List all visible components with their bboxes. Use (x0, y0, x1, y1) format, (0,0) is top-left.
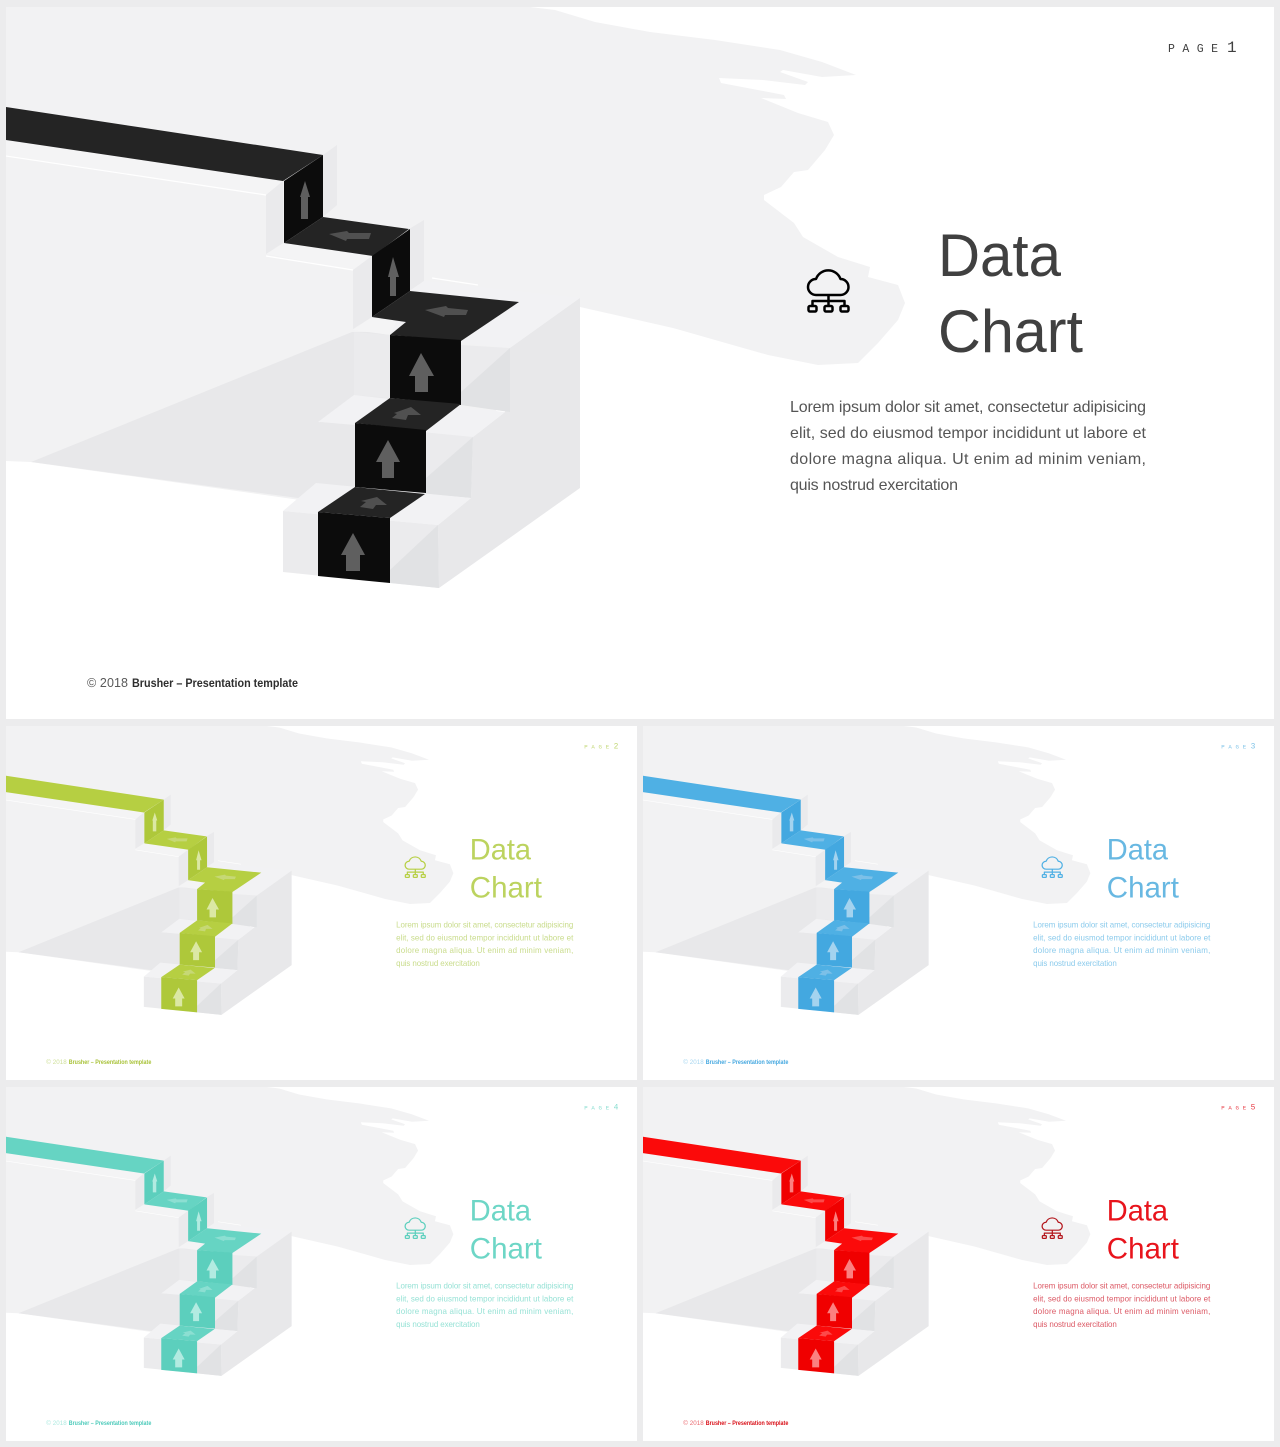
title (1107, 834, 1180, 905)
floor shadow (655, 1249, 849, 1337)
page number: 4 (614, 1103, 619, 1112)
body text: elit, sed do eiusmod tempor incididunt ut labore et (396, 933, 574, 942)
panel: slide 2 green (6, 726, 637, 1080)
brush stroke background (6, 726, 453, 971)
page number: 5 (1251, 1103, 1256, 1112)
page number: 2 (614, 742, 619, 751)
staircase (6, 107, 580, 588)
icon: cloud network (1042, 857, 1062, 877)
title: Data (1107, 1195, 1168, 1228)
body text: Lorem ipsum dolor sit amet, consectetur adipisicing (396, 920, 573, 929)
floor shadow (18, 1249, 212, 1337)
title (938, 222, 1083, 365)
carpet path with arrows (6, 107, 519, 583)
page number (1221, 1103, 1256, 1112)
footer: © 2018 (46, 1420, 67, 1427)
footer: Brusher – Presentation template (69, 1421, 152, 1427)
upper steps side faces (643, 792, 878, 889)
body text: elit, sed do eiusmod tempor incididunt ut labore et (790, 425, 1147, 442)
arrow icons (300, 181, 468, 571)
icon: cloud network (405, 1218, 425, 1238)
upper steps side faces (6, 792, 241, 889)
lower block faces (781, 1223, 929, 1376)
upper steps side faces (643, 1153, 878, 1250)
body text: Lorem ipsum dolor sit amet, consectetur adipisicing (1033, 920, 1210, 929)
staircase (643, 776, 929, 1015)
arrow icons (789, 1174, 873, 1367)
arrow icons (152, 1174, 236, 1367)
floor shadow (31, 332, 420, 510)
body text: quis nostrud exercitation (1033, 1320, 1117, 1329)
body text: quis nostrud exercitation (396, 959, 480, 968)
body text: dolore magna aliqua. Ut enim ad minim veniam, (790, 451, 1146, 468)
brush stroke background (643, 726, 1090, 971)
body text: dolore magna aliqua. Ut enim ad minim veniam, (396, 946, 573, 955)
footer: Brusher – Presentation template (706, 1060, 789, 1066)
floor shadow (655, 888, 849, 976)
staircase (6, 776, 292, 1015)
footer: Brusher – Presentation template (706, 1421, 789, 1427)
lower block faces (144, 862, 292, 1015)
page number: PAGE (584, 1104, 610, 1111)
brush stroke background (6, 1087, 453, 1332)
carpet path with arrows (6, 1137, 261, 1373)
page number: 1 (1227, 39, 1237, 57)
lower block faces (144, 1223, 292, 1376)
title: Chart (1107, 872, 1180, 905)
title: Chart (1107, 1233, 1180, 1266)
brush stroke background (6, 7, 905, 500)
title: Chart (470, 1233, 543, 1266)
body text: dolore magna aliqua. Ut enim ad minim veniam, (1033, 946, 1210, 955)
footer: © 2018 (87, 676, 128, 690)
footer: Brusher – Presentation template (69, 1060, 152, 1066)
page number: PAGE (584, 743, 610, 750)
arrow icons (789, 813, 873, 1006)
body text: quis nostrud exercitation (396, 1320, 480, 1329)
body text: Lorem ipsum dolor sit amet, consectetur adipisicing (790, 399, 1146, 416)
floor shadow (18, 888, 212, 976)
title: Data (938, 222, 1062, 289)
footer: Brusher – Presentation template (132, 676, 298, 690)
footer (683, 1420, 789, 1427)
body text: dolore magna aliqua. Ut enim ad minim veniam, (396, 1307, 573, 1316)
footer (46, 1059, 152, 1066)
arrow icons (152, 813, 236, 1006)
body text (396, 1281, 574, 1329)
panel: slide 3 blue (643, 726, 1274, 1080)
staircase (6, 1137, 292, 1376)
page number: PAGE (1168, 43, 1218, 56)
page number (584, 1103, 619, 1112)
body text: elit, sed do eiusmod tempor incididunt ut labore et (396, 1294, 574, 1303)
title: Data (470, 834, 531, 867)
title: Data (470, 1195, 531, 1228)
page number: 3 (1251, 742, 1256, 751)
page number: PAGE (1221, 743, 1247, 750)
upper steps side faces (6, 1153, 241, 1250)
page number: PAGE (1221, 1104, 1247, 1111)
body text: Lorem ipsum dolor sit amet, consectetur adipisicing (396, 1281, 573, 1290)
title: Data (1107, 834, 1168, 867)
panel: slide 4 teal (6, 1087, 637, 1441)
body text (1033, 1281, 1211, 1329)
title (1107, 1195, 1180, 1266)
footer: © 2018 (46, 1059, 67, 1066)
body text: quis nostrud exercitation (790, 477, 958, 494)
body text (790, 399, 1147, 494)
page number (1168, 39, 1237, 57)
lower block faces (781, 862, 929, 1015)
body text (1033, 920, 1211, 968)
carpet path with arrows (643, 1137, 898, 1373)
brush stroke background (643, 1087, 1090, 1332)
panel: slide 1 black (6, 7, 1274, 719)
body text: quis nostrud exercitation (1033, 959, 1117, 968)
body text: Lorem ipsum dolor sit amet, consectetur adipisicing (1033, 1281, 1210, 1290)
body text: dolore magna aliqua. Ut enim ad minim veniam, (1033, 1307, 1210, 1316)
title: Chart (470, 872, 543, 905)
page number (584, 742, 619, 751)
carpet path with arrows (643, 776, 898, 1012)
staircase (643, 1137, 929, 1376)
upper steps side faces (6, 140, 478, 335)
icon: cloud network (1042, 1218, 1062, 1238)
lower block faces (283, 281, 580, 588)
footer: © 2018 (683, 1059, 704, 1066)
footer (683, 1059, 789, 1066)
title (470, 834, 543, 905)
body text (396, 920, 574, 968)
body text: elit, sed do eiusmod tempor incididunt ut labore et (1033, 933, 1211, 942)
footer (46, 1420, 152, 1427)
body text: elit, sed do eiusmod tempor incididunt ut labore et (1033, 1294, 1211, 1303)
panel: slide 5 red (643, 1087, 1274, 1441)
icon: cloud network (405, 857, 425, 877)
title: Chart (938, 298, 1083, 365)
icon: cloud network (808, 270, 848, 312)
page number (1221, 742, 1256, 751)
carpet path with arrows (6, 776, 261, 1012)
title (470, 1195, 543, 1266)
footer: © 2018 (683, 1420, 704, 1427)
